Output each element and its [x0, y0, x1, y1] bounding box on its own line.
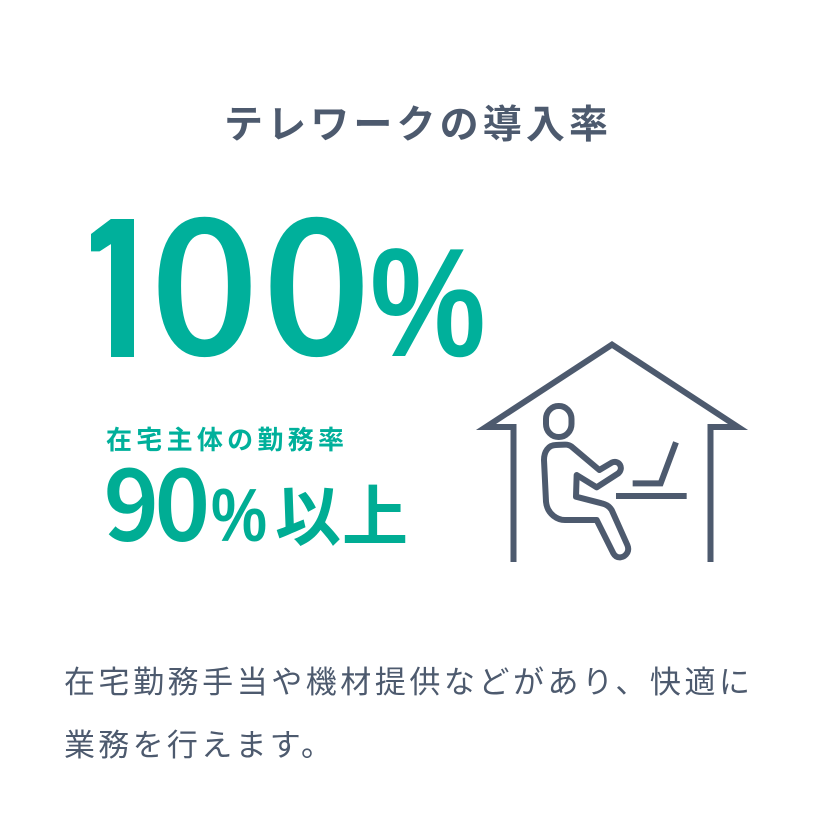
icon: desk	[616, 487, 687, 505]
icon: person body	[544, 445, 628, 557]
big stat: 100%: 0	[148, 139, 261, 411]
stat: 90% or more: 以	[275, 464, 341, 560]
big stat: 100%: 0	[260, 139, 373, 411]
stat: 90% or more: 上	[342, 464, 408, 560]
stat: 90% or more: 9	[103, 427, 160, 569]
title: テレワークの導入率	[224, 104, 608, 147]
big stat: 100%	[91, 216, 482, 358]
icon: person head	[546, 406, 572, 437]
stat: 90% or more	[103, 427, 408, 569]
stat: 90% or more: 0	[154, 427, 211, 569]
icon: person working at a laptop inside a house	[486, 345, 738, 562]
description text	[64, 665, 750, 763]
label: home-based work rate: 在宅主体の勤務率	[106, 425, 344, 455]
description text: 業務を行えます。	[64, 728, 332, 763]
big stat: 100%: %	[370, 216, 486, 390]
icon: laptop	[633, 442, 676, 483]
stat: 90% or more: %	[211, 473, 267, 557]
description text: 在宅勤務手当や機材提供などがあり、快適に	[64, 665, 750, 700]
big stat: 100%: 1	[63, 131, 179, 417]
icon: house outline	[486, 345, 738, 562]
